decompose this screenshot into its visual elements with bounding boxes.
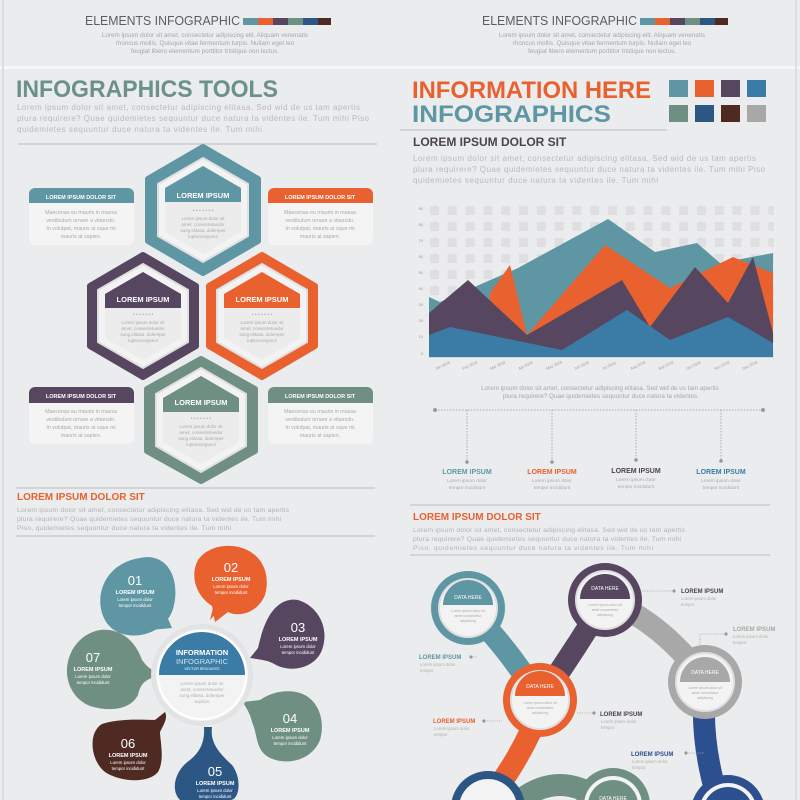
hexagon: orange <box>209 255 315 377</box>
timeline: tempor incididunt <box>703 485 740 491</box>
petal 01: tempor incididunt <box>119 603 152 608</box>
intro text left: quidemietes sequuntur duce natura ta videntes ile. Tum mihi <box>17 125 262 134</box>
text block bottom right: plura requirere? Quae quidemietes sequuntur duce natura ta videntes ile. Tum mihi <box>413 536 681 543</box>
heading: lorem ipsum dolor sit (left): LOREM IPSUM DOLOR SIT <box>17 492 145 503</box>
flower diagram <box>67 546 325 800</box>
petal 03: 03 <box>291 620 305 635</box>
petal 07: 07 <box>86 650 100 665</box>
title: information here infographics: INFORMATION HERE <box>412 77 651 104</box>
side box top-right: LOREM IPSUM DOLOR SIT <box>285 195 356 201</box>
area chart: 0 <box>421 351 424 356</box>
intro text left: plura requirere? Quae quidemietes sequuntur duce natura ta videntes ile. Tum mihi Piso <box>17 114 370 123</box>
hexagon: teal top: sung elitasa. dolemper <box>180 228 226 233</box>
timeline: LOREM IPSUM <box>611 468 661 475</box>
intro text left <box>17 103 370 134</box>
area chart: Sep 2018 <box>658 360 674 371</box>
header: left: ELEMENTS INFOGRAPHIC <box>85 13 240 28</box>
center circle: INFORMATION <box>176 648 228 657</box>
side box bottom-right <box>268 387 373 444</box>
header: left: feugiat libero elementum porttitor tristique non lectus. <box>131 48 279 55</box>
area chart: 70 <box>419 238 424 243</box>
node: teal data: adipiscing <box>460 619 476 623</box>
title: infographics tools: INFOGRAPHICS TOOLS <box>16 76 278 103</box>
header: right: Lorem ipsum dolor sit amet, consectetur adipiscing elit. Aliquam venenatis <box>499 32 705 39</box>
petal 02 <box>194 546 267 622</box>
area chart: 10 <box>419 334 424 339</box>
petal 07: Lorem ipsum dolor <box>75 674 111 679</box>
hexagon: orange: Lorem ipsum dolor sit <box>240 320 284 325</box>
petal 06: Lorem ipsum dolor <box>110 760 146 765</box>
callout labels: LOREM IPSUM <box>600 712 642 718</box>
hexagon: sage bottom <box>147 359 255 481</box>
hexagon: orange: luptureongveol <box>247 338 277 343</box>
header: left: rhoncus mollis. Quisque vitae fermentum turpis. Nullam eget leo <box>116 40 295 47</box>
colour swatches <box>669 80 766 122</box>
hexagon: teal top <box>148 147 258 273</box>
area chart: Jun 2018 <box>574 361 590 371</box>
panel: hexagon cluster <box>29 147 373 481</box>
side box bottom-right: mauris at sapien. <box>300 433 340 439</box>
timeline: Lorem ipsum dolor <box>701 478 741 484</box>
callout labels: Lorem ipsum dolor <box>601 719 637 724</box>
node: bottom nodes <box>451 768 765 800</box>
text block bottom right <box>413 527 686 552</box>
intro text left: Lorem ipsum dolor sit amet, consectetur adipiscing elitasa. Sed wid de us tam apertis <box>17 103 360 112</box>
callout labels: Lorem ipsum dolor <box>420 662 456 667</box>
node: purple data <box>568 563 642 637</box>
area chart: 90 <box>419 206 424 211</box>
side box bottom-right: LOREM IPSUM DOLOR SIT <box>285 394 356 400</box>
side box top-left: LOREM IPSUM DOLOR SIT <box>46 195 117 201</box>
side box top-left: Maecenas eu mauris in massa <box>45 210 117 216</box>
petal 05: 05 <box>208 764 222 779</box>
petal 02: tempor incididunt <box>215 590 248 595</box>
petal 06 <box>93 712 166 780</box>
node: orange data: amet consectetur <box>527 706 554 710</box>
area chart: Apr 2018 <box>518 361 533 371</box>
side box top-right: Maecenas eu mauris in massa <box>284 210 356 216</box>
node: gray data: adipiscing <box>697 696 713 700</box>
callout labels: tempor <box>733 640 747 645</box>
petal 05: Lorem ipsum dolor <box>197 788 233 793</box>
side box bottom-left: In volutpat, mauris at sque mi <box>46 425 116 431</box>
center circle: sung elitasa. dolemper <box>179 693 225 698</box>
center circle <box>151 624 253 726</box>
text block bottom right: Lorem ipsum dolor sit amet, consectetur adipiscing elitasa. Sed wid de us tam apertis <box>413 527 686 534</box>
intro text right <box>413 154 766 185</box>
callout labels: LOREM IPSUM <box>433 719 475 725</box>
hexagon: purple: Lorem ipsum dolor sit <box>121 320 165 325</box>
timeline: tempor incididunt <box>534 485 571 491</box>
node: purple data: DATA HERE <box>591 586 619 592</box>
callout labels: LOREM IPSUM <box>733 627 775 633</box>
side box top-right <box>268 188 373 245</box>
hexagon: sage bottom: Lorem ipsum dolor sit <box>179 424 223 429</box>
header: left <box>85 13 331 55</box>
hexagon: teal top: LOREM IPSUM <box>177 191 229 200</box>
petal 07: tempor incididunt <box>77 680 110 685</box>
area chart: Jan 2018 <box>435 361 451 371</box>
petal 04: LOREM IPSUM <box>271 728 310 734</box>
petal 05: LOREM IPSUM <box>196 781 235 787</box>
side box bottom-left: LOREM IPSUM DOLOR SIT <box>46 394 117 400</box>
intro text right: quidemietes sequuntur duce natura ta videntes ile. Tum mihi <box>413 176 658 185</box>
timeline: tempor incididunt <box>618 484 655 490</box>
text block left <box>17 507 290 532</box>
side box top-right: In volutpat, mauris at sque mi <box>285 226 355 232</box>
node: gray data <box>668 645 742 719</box>
area chart: 80 <box>419 222 424 227</box>
chart caption: plura requirere? Quae quidemietes sequuntur duce natura ta videntes <box>503 393 697 400</box>
hexagon: teal top: • • • • • • • <box>193 208 214 214</box>
side box bottom-left: mauris at sapien. <box>61 433 101 439</box>
side box bottom-left: vestibulum ornare a vitaecdo. <box>46 417 116 423</box>
hexagon: orange: • • • • • • • <box>252 312 273 318</box>
header: right: feugiat libero elementum porttitor tristique non lectus. <box>528 48 676 55</box>
hexagon: sage bottom: amet, consectetuedor <box>179 430 223 435</box>
callout labels: LOREM IPSUM <box>681 589 723 595</box>
hexagon: sage bottom: LOREM IPSUM <box>175 398 227 407</box>
petal 03: Lorem ipsum dolor <box>280 644 316 649</box>
chart caption: Lorem ipsum dolor sit amet, consectetur adipiscing elitasa. Sed wid de us tam apertis <box>481 385 719 392</box>
petal 01: 01 <box>128 573 142 588</box>
petal 03: LOREM IPSUM <box>279 637 318 643</box>
area chart: Feb 2018 <box>462 360 478 371</box>
callout labels: Lorem ipsum dolor <box>632 759 668 764</box>
header: right: ELEMENTS INFOGRAPHIC <box>482 13 637 28</box>
timeline <box>433 408 765 491</box>
hexagon: orange: amet, consectetuedor <box>240 326 284 331</box>
hexagon: sage bottom: sung elitasa. dolemper <box>178 436 224 441</box>
area chart: 40 <box>419 286 424 291</box>
node: gray data: Lorem ipsum dolor sit <box>688 686 722 690</box>
petal 02: LOREM IPSUM <box>212 577 251 583</box>
callout labels: tempor <box>601 725 615 730</box>
area chart: Dec 2018 <box>742 360 758 371</box>
area chart: 60 <box>419 254 424 259</box>
intro text right: plura requirere? Quae quidemietes sequuntur duce natura ta videntes ile. Tum mihi Piso <box>413 165 766 174</box>
petal 05 <box>175 727 239 800</box>
hexagon: purple: luptureongveol <box>128 338 158 343</box>
callout labels: LOREM IPSUM <box>631 752 673 758</box>
side box top-left: mauris at sapien. <box>61 234 101 240</box>
intro text right: Lorem ipsum dolor sit amet, consectetur adipiscing elitasa. Sed wid de us tam apertis <box>413 154 756 163</box>
header: left: Lorem ipsum dolor sit amet, consectetur adipiscing elit. Aliquam venenatis <box>102 32 308 39</box>
petal 01 <box>100 557 175 635</box>
hexagon: teal top: Lorem ipsum dolor sit <box>181 216 225 221</box>
center circle: INFOGRAPHIC <box>176 657 229 666</box>
node: teal data: amet consectetur <box>455 614 482 618</box>
area chart: Mar 2018 <box>490 360 506 371</box>
text block left: Piso, quidemietes sequuntur duce natura ta videntes ile. Tum mihi <box>17 525 231 532</box>
area chart <box>419 206 774 371</box>
title: information here infographics: INFOGRAPHICS <box>412 101 611 128</box>
timeline: LOREM IPSUM <box>696 469 746 476</box>
text block left: plura requirere? Quae quidemietes sequuntur duce natura ta videntes ile. Tum mihi <box>17 516 281 523</box>
petal 04: 04 <box>283 711 297 726</box>
node: teal data: DATA HERE <box>454 595 482 601</box>
node: purple data: Lorem ipsum dolor sit <box>588 603 622 607</box>
node: orange data <box>503 663 577 737</box>
timeline: Lorem ipsum dolor <box>532 478 572 484</box>
timeline: tempor incididunt <box>449 485 486 491</box>
hexagon: purple: amet, consectetuedor <box>121 326 165 331</box>
title: information here infographics <box>412 77 651 128</box>
text block left: Lorem ipsum dolor sit amet, consectetur adipiscing elitasa. Sed wid de us tam apertis <box>17 507 290 514</box>
hexagon: purple <box>90 255 196 377</box>
area chart: 50 <box>419 270 424 275</box>
petal 04 <box>243 691 322 761</box>
node: gray data: DATA HERE <box>691 670 719 676</box>
petal 04: Lorem ipsum dolor <box>272 735 308 740</box>
node: orange data: adipiscing <box>532 711 548 715</box>
timeline: LOREM IPSUM <box>527 469 577 476</box>
callout labels: tempor <box>434 732 448 737</box>
petal 07 <box>67 630 152 709</box>
side box top-left: In volutpat, mauris at sque mi <box>46 226 116 232</box>
callout labels: tempor <box>681 602 695 607</box>
petal 01: Lorem ipsum dolor <box>117 597 153 602</box>
petal 04: tempor incididunt <box>274 741 307 746</box>
area chart: Jul 2018 <box>602 361 616 371</box>
callout labels: tempor <box>632 765 646 770</box>
node: purple data: adipiscing <box>597 613 613 617</box>
heading: lorem ipsum dolor sit (bottom right): LOREM IPSUM DOLOR SIT <box>413 512 541 523</box>
timeline: Lorem ipsum dolor <box>616 477 656 483</box>
hexagon: purple: sung elitasa. dolemper <box>120 332 166 337</box>
hexagon: orange: sung elitasa. dolemper <box>239 332 285 337</box>
side box top-right: mauris at sapien. <box>300 234 340 240</box>
petal 03 <box>250 600 325 669</box>
area chart: Oct 2018 <box>686 361 701 371</box>
node: teal data <box>431 571 505 645</box>
center circle: VECTOR RESOURCE <box>184 667 220 671</box>
side box bottom-right: In volutpat, mauris at sque mi <box>285 425 355 431</box>
side box bottom-left <box>29 387 134 444</box>
center circle: Lorem ipsum dolor sit <box>180 681 224 686</box>
header: right: rhoncus mollis. Quisque vitae fermentum turpis. Nullam eget leo <box>513 40 692 47</box>
node: orange data: Lorem ipsum dolor sit <box>523 701 557 705</box>
hexagon: purple: LOREM IPSUM <box>117 295 169 304</box>
timeline: LOREM IPSUM <box>442 469 492 476</box>
area chart: May 2018 <box>546 360 563 371</box>
callout labels: Lorem ipsum dolor <box>681 596 717 601</box>
petal 05: tempor incididunt <box>199 794 232 799</box>
petal 02: 02 <box>224 560 238 575</box>
side box top-left: vestibulum ornare a vitaecdo. <box>46 218 116 224</box>
center circle: explore <box>195 699 210 704</box>
petal 06: LOREM IPSUM <box>109 753 148 759</box>
hexagon: sage bottom: luptureongveol <box>186 442 216 447</box>
petal 06: 06 <box>121 736 135 751</box>
area chart: 30 <box>419 302 424 307</box>
node: gray data: amet consectetur <box>692 691 719 695</box>
text block bottom right: Piso, quidemietes sequuntur duce natura ta videntes ile. Tum mihi <box>413 545 653 552</box>
side box bottom-left: Maecenas eu mauris in massa <box>45 409 117 415</box>
connectors <box>470 600 718 800</box>
area chart: Aug 2018 <box>630 360 646 371</box>
area chart: 20 <box>419 318 424 323</box>
petal 03: tempor incididunt <box>282 650 315 655</box>
petal 07: LOREM IPSUM <box>74 667 113 673</box>
hexagon: orange: LOREM IPSUM <box>236 295 288 304</box>
area chart: Nov 2018 <box>714 360 730 371</box>
node: purple data: amet consectetur <box>592 608 619 612</box>
center circle: amet, consectetuedor <box>180 687 224 692</box>
chart caption <box>481 385 719 400</box>
side box bottom-right: vestibulum ornare a vitaecdo. <box>285 417 355 423</box>
side box bottom-right: Maecenas eu mauris in massa <box>284 409 356 415</box>
metaball chain diagram <box>419 563 775 800</box>
hexagon: sage bottom: • • • • • • • <box>191 416 212 422</box>
petal 01: LOREM IPSUM <box>116 590 155 596</box>
callout labels: tempor <box>420 668 434 673</box>
side box top-left <box>29 188 134 245</box>
callout labels: Lorem ipsum dolor <box>434 726 470 731</box>
timeline: Lorem ipsum dolor <box>447 478 487 484</box>
petal 02: Lorem ipsum dolor <box>213 584 249 589</box>
hexagon: purple: • • • • • • • <box>133 312 154 318</box>
header: right <box>482 13 728 55</box>
side box top-right: vestibulum ornare a vitaecdo. <box>285 218 355 224</box>
hexagon: teal top: amet, consectetuedor <box>181 222 225 227</box>
hexagon: teal top: luptureongveol <box>188 234 218 239</box>
callout labels: Lorem ipsum dolor <box>733 634 769 639</box>
heading: lorem ipsum dolor sit (right): LOREM IPSUM DOLOR SIT <box>413 135 567 149</box>
node: teal data: Lorem ipsum dolor sit <box>451 609 485 613</box>
petal 06: tempor incididunt <box>112 766 145 771</box>
node: orange data: DATA HERE <box>526 684 554 690</box>
callout labels <box>419 589 775 770</box>
callout labels: LOREM IPSUM <box>419 655 461 661</box>
